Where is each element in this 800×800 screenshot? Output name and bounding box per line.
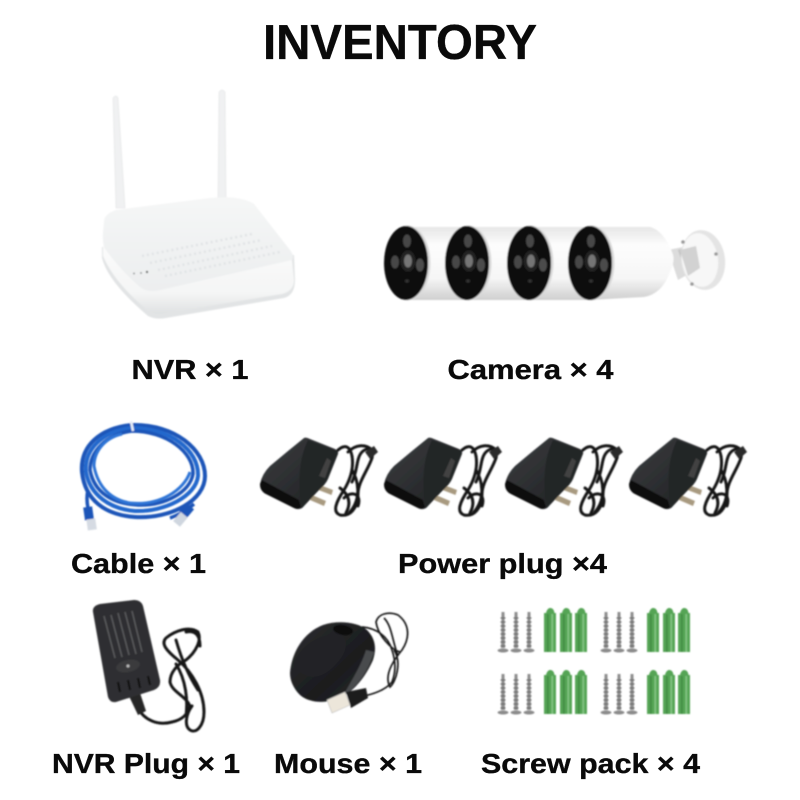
adapter strain relief xyxy=(128,690,146,715)
label: Screw pack: Screw pack × 4 xyxy=(481,748,701,779)
icon: four power plugs xyxy=(260,438,747,515)
label: Camera: Camera × 4 xyxy=(448,354,614,385)
set 1 xyxy=(498,608,587,652)
mouse body xyxy=(290,622,375,702)
USB connector xyxy=(346,688,368,708)
mouse cable xyxy=(352,613,408,698)
power plug 1 xyxy=(260,438,378,515)
icon: computer mouse xyxy=(290,613,408,713)
set 2 xyxy=(600,608,690,652)
adapter badge xyxy=(115,658,141,674)
set 4 xyxy=(600,670,690,714)
NVR underside xyxy=(102,247,295,319)
icon: camera bracket xyxy=(668,227,729,293)
icon: screw pack xyxy=(498,608,690,714)
mouse side panel xyxy=(343,650,374,696)
label: Power plug: Power plug ×4 xyxy=(398,548,608,579)
label: Cable: Cable × 1 xyxy=(71,548,206,579)
NVR vent dots xyxy=(142,234,280,276)
mouse palm rest xyxy=(294,634,346,677)
adapter cord xyxy=(138,629,204,731)
icon: NVR plug adapter xyxy=(93,600,204,731)
icon: four bullet cameras xyxy=(384,226,729,300)
right connector xyxy=(173,503,194,527)
icon: NVR recorder with two antennas xyxy=(102,90,295,319)
cable tie xyxy=(131,421,133,431)
label: NVR Plug: NVR Plug × 1 xyxy=(52,748,240,779)
power plug 2 xyxy=(384,438,502,515)
camera 4 lens xyxy=(568,226,614,300)
mouse wheel xyxy=(332,623,354,637)
icon: blue network cable xyxy=(82,421,205,530)
power plug 4 xyxy=(629,438,747,515)
title: INVENTORY xyxy=(263,16,537,70)
left connector xyxy=(83,506,97,530)
camera 3 lens xyxy=(507,226,554,300)
camera bodies xyxy=(406,227,470,300)
label: NVR: NVR × 1 xyxy=(132,354,248,385)
camera 1 lens xyxy=(384,226,430,300)
adapter body xyxy=(93,600,160,702)
label: Mouse: Mouse × 1 xyxy=(274,748,422,779)
power plug 3 xyxy=(505,438,623,515)
NVR top surface xyxy=(103,197,293,292)
icon: left antenna xyxy=(113,96,125,208)
icon: right antenna xyxy=(218,90,226,200)
NVR status lights xyxy=(133,271,148,274)
set 3 xyxy=(498,670,587,714)
camera 2 lens xyxy=(445,226,492,300)
NVR front edge xyxy=(103,246,294,314)
adapter vents xyxy=(104,611,142,658)
